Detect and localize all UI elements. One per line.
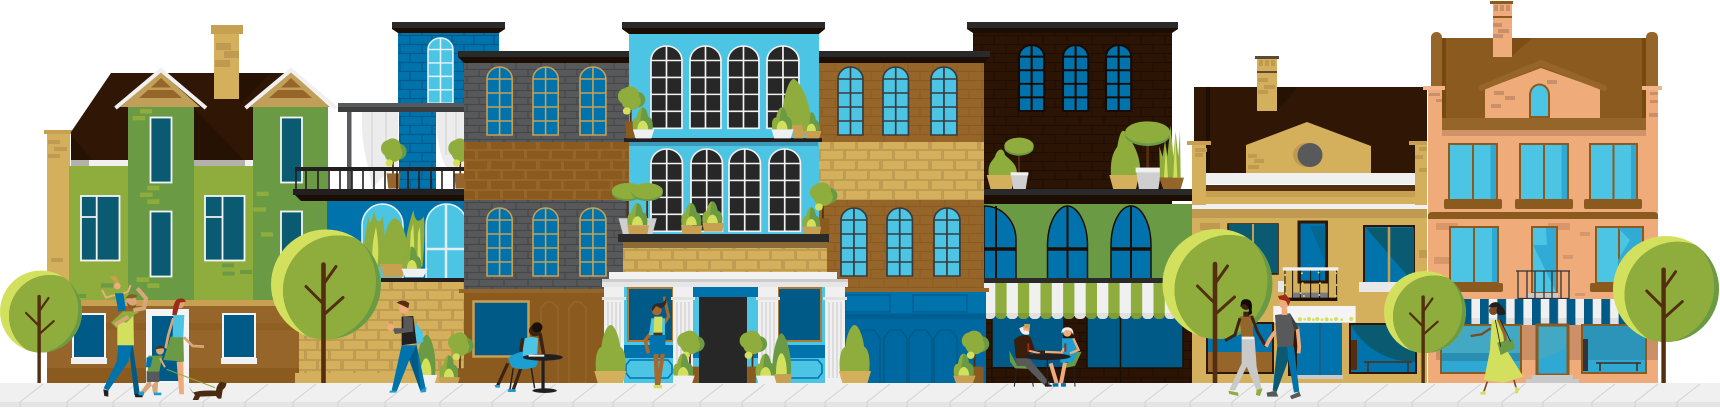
young child [139,346,165,395]
blue upper storey [392,22,505,105]
main chimney [211,25,243,99]
foreground planters by walker [417,332,474,383]
dark brick wall [967,22,1178,190]
portico entablature [602,272,848,287]
tree 4 [1373,265,1475,386]
house: tan with dark roof [1187,56,1427,383]
green storey [984,204,1193,283]
upper sills [1444,199,1642,209]
building: brown brick [819,51,990,383]
balcony railing [293,169,465,201]
brown roof [71,73,290,160]
terrace plants [364,210,428,277]
wood ground floor [459,289,605,383]
sidewalk [0,383,1720,407]
striped awning [984,283,1176,319]
shopfront plants [953,331,989,383]
cafe front [984,316,1193,383]
window shadows [1490,145,1636,199]
dark framed windows [838,67,960,276]
shop sign [1273,306,1356,323]
people: couple holding hands [1225,295,1301,399]
top row windows [651,46,799,128]
chimney [1490,1,1532,57]
blue shopfront [835,288,989,383]
portico plants [594,325,871,383]
person: woman waving [645,296,669,388]
second ledge and brick band [618,234,829,272]
dormer [1481,63,1604,118]
building: grey and brown brick [458,51,629,383]
person: walker with backpack [387,301,427,393]
green walls [69,107,328,301]
house: green gabled house [44,25,336,383]
mother [163,298,204,394]
dark frame windows [1019,45,1131,111]
building: dark brick and green [967,22,1197,383]
person: seated woman at cafe table [494,322,563,393]
building: cyan with portico [594,22,871,383]
shopfront [1436,325,1658,383]
chimney [1255,56,1279,111]
person: woman in yellow dress [1471,302,1523,395]
building: blue brick with balcony [293,22,505,383]
tree 2 [256,222,393,384]
shop windows and door [1207,323,1416,379]
cyan wall [622,22,825,236]
iron balcony [1516,271,1570,299]
tree 3 [1148,221,1284,383]
upper floor plants [612,79,837,234]
top ledge [624,138,822,146]
tree 1 [0,265,91,385]
gable right [246,70,336,108]
second row windows [651,149,800,231]
tan brick wall [295,278,469,383]
upper windows [1228,222,1414,292]
terrace plants [987,121,1184,189]
walls and bands [1187,141,1427,383]
gold framed windows [487,67,606,276]
left chimney column [44,130,73,383]
brick storeys [819,51,990,290]
cyan ground floor [623,287,826,383]
people: cafe couple [1009,324,1082,387]
father carrying child [102,276,146,397]
people: family with dog [102,276,227,400]
eave [1442,118,1646,136]
tree 5 [1599,228,1720,384]
peach walls and roof [1423,32,1662,383]
roof [1194,87,1427,173]
balcony roof [338,103,465,190]
dog and leash [167,369,227,400]
balcony plants [381,138,474,189]
second floor windows [1434,223,1643,299]
ground floor [47,300,300,383]
portico columns [602,287,847,383]
gable left [116,70,206,108]
navy striped awning [1463,299,1627,325]
grey storeys [458,51,629,290]
upper windows [1449,144,1637,200]
balcony with fairy lights [1283,267,1338,301]
balcony interior and curtains [362,105,466,190]
lower blue wall with arched windows [327,201,467,281]
ledge [984,189,1197,204]
upper windows [81,118,302,276]
floor band [1428,212,1658,219]
house: peach brick [1423,1,1662,383]
dormer with round window [1246,122,1371,173]
